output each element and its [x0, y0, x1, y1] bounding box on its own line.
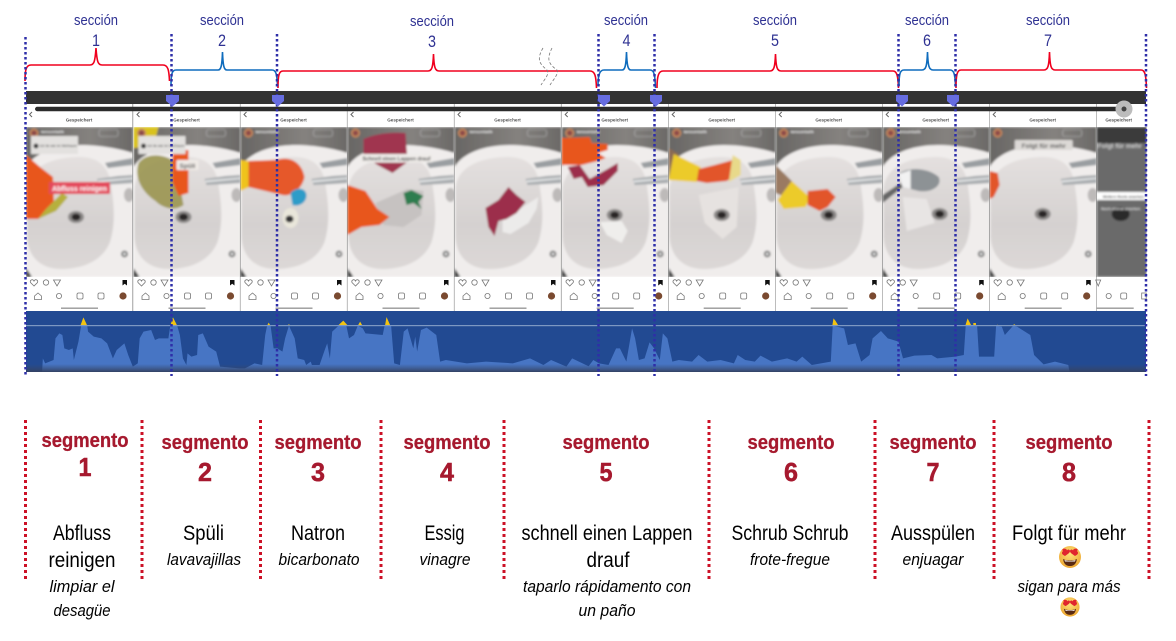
segment 2: lavavajillas [167, 550, 241, 569]
frame 7: scrubbing: Gespeichert [708, 118, 735, 122]
frame 7: scrubbing [669, 104, 777, 311]
segment 3 [274, 432, 362, 569]
player bar [26, 91, 1146, 104]
frame 1: Abfluss reinigen [26, 104, 134, 311]
segment 8 [1012, 432, 1126, 617]
label: sección 2 [200, 12, 244, 50]
segment 5 [522, 432, 692, 620]
frame 5: cloth in sink [454, 104, 562, 311]
frame 6: wiping with cloth [562, 104, 670, 311]
segment 1 [42, 430, 128, 620]
segment 5: un paño [578, 601, 636, 620]
segment 8: sigan para más [1018, 577, 1121, 596]
segment 8: 8 [1062, 457, 1076, 487]
segment 4: 4 [440, 457, 455, 487]
segment 2: 2 [198, 457, 212, 487]
frame 3: Natron [240, 104, 348, 311]
segment 7 [890, 432, 976, 569]
icon: heart-eyes emoji [1059, 546, 1081, 568]
frame 9: rinsing: Gespeichert [922, 118, 949, 122]
icon: heart-eyes emoji small [1060, 597, 1080, 617]
segment 1: reinigen [48, 549, 116, 572]
frame 11: end screen: Weitere Reels ansehen [1103, 195, 1145, 199]
frame 3: Natron: Gespeichert [280, 118, 307, 122]
label: sección 5: 5 [771, 31, 779, 50]
label: Abfluss reinigen [49, 182, 110, 194]
segment 6: Schrub Schrub [732, 522, 848, 545]
scrub track [35, 107, 1125, 111]
bracket: sección 5 [657, 54, 898, 88]
axis break mark [539, 48, 557, 85]
bracket: sección 2 [171, 52, 278, 86]
segment 8: segmento [1026, 432, 1112, 454]
label: sección 1: 1 [92, 31, 100, 50]
frame 9: rinsing [883, 104, 991, 311]
section boundary lines [26, 34, 1146, 376]
label: sección 3 [410, 13, 454, 51]
segment 2: Spüli [183, 522, 224, 545]
clipping peaks [80, 317, 1016, 326]
bracket: sección 4 [598, 52, 656, 88]
segment 4: Essig [424, 522, 464, 545]
segment 5: 5 [600, 457, 612, 487]
section brackets [25, 48, 1146, 88]
segment 1: Abfluss [53, 522, 111, 545]
frame 8: scrubbing drain: Gespeichert [815, 118, 842, 122]
frame 10: Folgt für mehr [990, 104, 1098, 311]
frame 1: Abfluss reinigen: Iamsumballk [41, 130, 65, 134]
segment 1: limpiar el [50, 577, 116, 596]
label: Schnell einen Lappen drauf: Schnell einen Lappen drauf [362, 156, 431, 162]
segment 1: 1 [78, 452, 92, 482]
segment 5: taparlo rápidamento con [523, 577, 691, 596]
segment 7: enjuagar [902, 550, 965, 569]
frame 6: wiping with cloth: Iamsumballk [577, 130, 601, 134]
bracket: sección 3 [278, 54, 596, 88]
label: sección 2: 2 [218, 31, 226, 50]
frame 11: end screen: Gespeichert [1105, 118, 1132, 122]
segment 5: segmento [562, 432, 650, 454]
label: sección 1: sección [74, 12, 118, 29]
label: sección 2: sección [200, 12, 244, 29]
section labels [74, 12, 1070, 51]
frame 11: end screen [1096, 104, 1147, 311]
audio waveform [26, 311, 1146, 372]
segment 8: Folgt für mehr [1012, 522, 1126, 545]
waveform right half [580, 326, 1069, 372]
label: sección 4: 4 [622, 31, 630, 50]
segment 7: Ausspülen [891, 522, 975, 545]
bracket: sección 6 [899, 52, 956, 86]
segment 3: bicarbonato [278, 550, 360, 569]
label: sección 6: sección [905, 12, 949, 29]
bracket: sección 1 [25, 48, 170, 81]
label: Spüli: Spüli [180, 163, 196, 170]
segment dividers [26, 420, 1149, 582]
segment 3: Natron [291, 522, 345, 545]
bracket: sección 7 [956, 52, 1146, 88]
segment 7: 7 [926, 457, 940, 487]
label: sección 4 [604, 12, 648, 50]
segment 7: segmento [890, 432, 976, 454]
frame 5: cloth in sink: Iamsumballk [470, 130, 493, 134]
frame 2: Spüli [134, 104, 242, 311]
segment 1: desagüe [54, 601, 110, 620]
label: sección 3: 3 [428, 32, 436, 51]
segment 4 [404, 432, 490, 569]
label: sección 6: 6 [923, 31, 931, 50]
waveform floor shading [26, 364, 1146, 372]
segment 6: segmento [748, 432, 834, 454]
waveform left half [42, 326, 600, 372]
frame 2: Spüli: Gespeichert [173, 118, 200, 122]
frame 4: Essig: Gespeichert [387, 118, 414, 122]
label: sección 7 [1026, 12, 1070, 50]
frame 11: end screen: Folgt für mehr [1098, 143, 1142, 150]
label: sección 7: 7 [1044, 31, 1052, 50]
loudness reference line [26, 325, 1146, 326]
label: Folgt für mehr [1015, 140, 1073, 150]
frame 6: wiping with cloth: Gespeichert [601, 118, 628, 122]
segment 2 [162, 432, 248, 569]
frame 2: Spüli: Ich lie wie im Weltraum [148, 144, 184, 148]
label: sección 6 [905, 12, 949, 50]
frame 10: Folgt für mehr: Gespeichert [1029, 118, 1056, 122]
label: sección 5 [753, 12, 797, 50]
label: Schnell einen Lappen drauf [360, 154, 432, 162]
label: sección 4: sección [604, 12, 648, 29]
segment 5: drauf [586, 549, 630, 572]
frame 8: scrubbing drain [776, 104, 884, 311]
segment 6: frote-fregue [750, 550, 830, 569]
frame 5: cloth in sink: Gespeichert [494, 118, 521, 122]
frame 11: end screen: Noch einmal ansehen [1101, 207, 1141, 211]
frame 1: Abfluss reinigen: Ich lie wie im Weltraum [40, 144, 77, 148]
frame 8: scrubbing drain: Iamsumballk [791, 130, 815, 134]
segment 4: vinagre [420, 550, 470, 569]
segment 3: 3 [311, 457, 325, 487]
segment 5: schnell einen Lappen [522, 522, 692, 545]
segment 1: segmento [42, 430, 128, 452]
segment 6: 6 [784, 457, 798, 487]
segment 6 [732, 432, 848, 569]
label: sección 7: sección [1026, 12, 1070, 29]
label: sección 5: sección [753, 12, 797, 29]
playhead knob [1116, 100, 1132, 118]
video timeline strip [26, 91, 1147, 312]
timeline markers [166, 95, 959, 106]
label: sección 1 [74, 12, 118, 50]
label: Spüli [176, 160, 198, 170]
segment 3: segmento [274, 432, 362, 454]
label: sección 3: sección [410, 13, 454, 30]
segment 2: segmento [162, 432, 248, 454]
frame 3: Natron: Iamsumballk [256, 130, 279, 134]
frame 7: scrubbing: Iamsumballk [684, 130, 708, 134]
label: Folgt für mehr: Folgt für mehr [1022, 143, 1066, 150]
frame 9: rinsing: Iamsumballk [898, 130, 922, 134]
label: Abfluss reinigen: Abfluss reinigen [52, 186, 107, 193]
frame 4: Essig [348, 104, 456, 311]
segment 4: segmento [404, 432, 490, 454]
frame 1: Abfluss reinigen: Gespeichert [66, 118, 93, 122]
